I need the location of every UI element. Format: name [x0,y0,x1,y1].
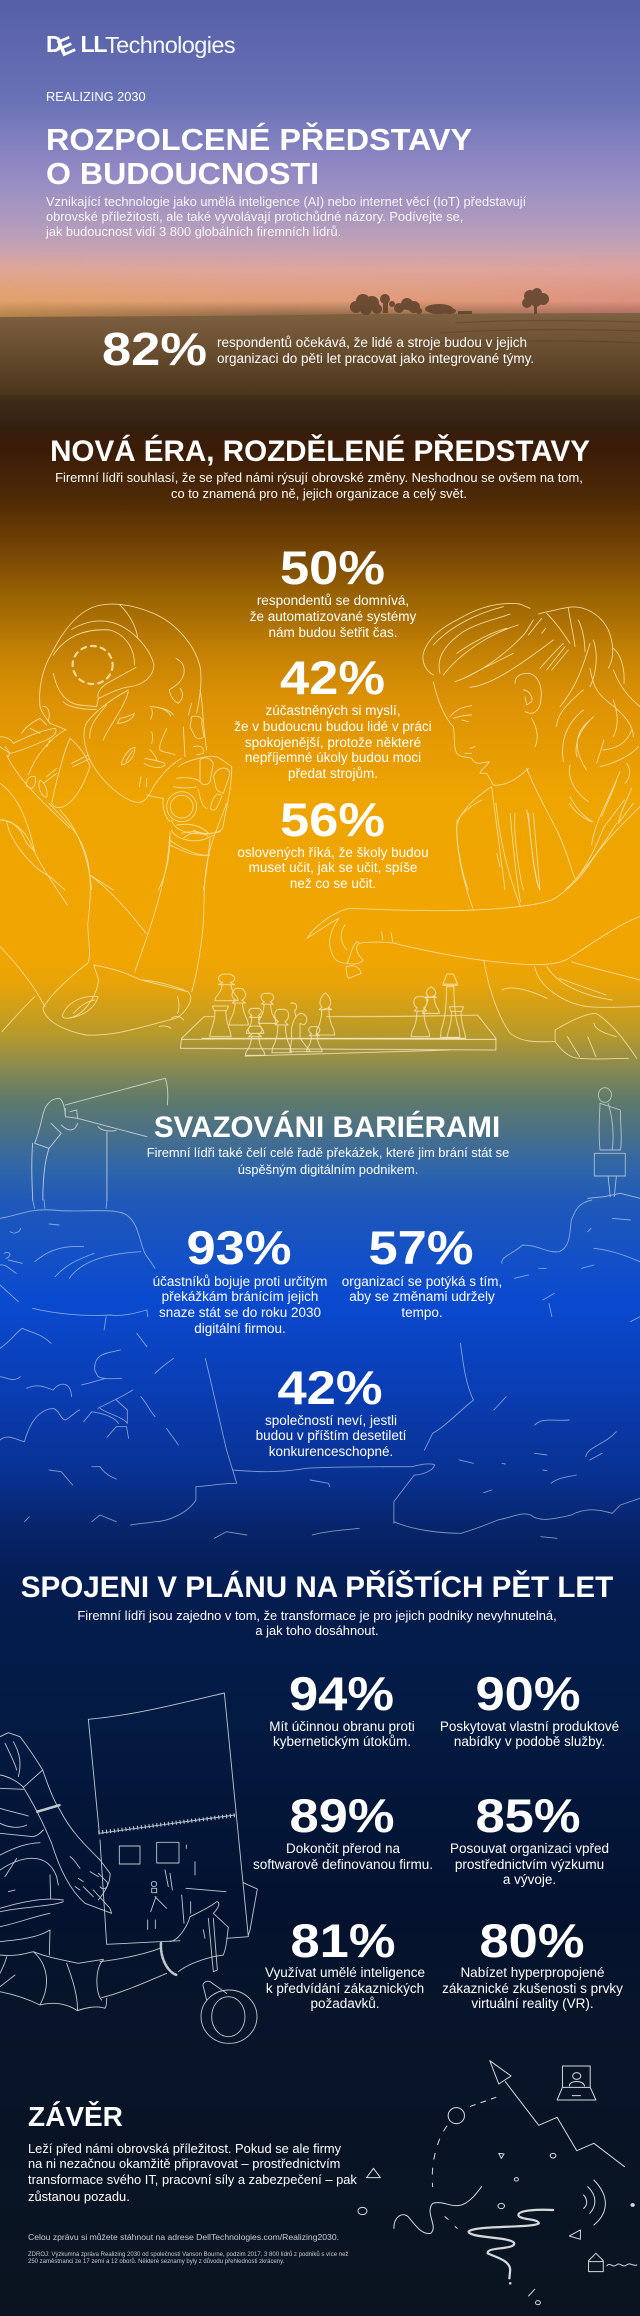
stat block: 42%: předat strojům. [288,766,378,781]
sunset glow over horizon [0,266,640,317]
stat block: 81%: k předvídání zákaznických [266,1981,424,1996]
source note: ZDROJ: Výzkumná zpráva Realizing 2030 od společnosti Vanson Bourne, podzim 2017. 3 800 lídrů z podniků s více než [28,2251,348,2258]
stat block: 42% companies: 42% [278,1361,382,1414]
illustration: woman playing chess [307,603,640,1059]
stat block: 57%: aby se změnami udržely [349,1289,495,1304]
stat block: 80%: 80% [480,1914,584,1967]
stat block: 56%: oslovených říká, že školy budou [237,845,429,860]
stat block: 42% companies: konkurenceschopné. [269,1444,393,1459]
intro text: Vznikající technologie jako umělá inteligence (AI) nebo internet věcí (IoT) představují [46,194,527,209]
illustration: woman drawing in spiral notebook [0,1693,257,2043]
stat block: 93%: digitální firmou. [194,1321,286,1336]
section intro: barriers: úspěšným digitálním podnikem. [238,1162,418,1177]
conclusion text: transformace svého IT, pracovní síly a zabezpečení – pak [28,2172,357,2187]
illustration: arrow, laptop and doodles [358,2061,637,2305]
intro text [45,194,527,239]
heading: barriers: SVAZOVÁNI BARIÉRAMI [154,1110,500,1144]
conclusion text: Leží před námi obrovská příležitost. Pokud se ale firmy [28,2141,342,2156]
intro text: obrovské příležitosti, ale také vyvolávají protichůdné názory. Podívejte se, [46,209,463,224]
stat block: 80% [442,1914,623,2011]
illustration: robot playing chess [0,604,232,1035]
stat block: 42%: nepříjemné úkoly budou moci [245,750,421,765]
stat block: 57% [342,1221,502,1320]
stat block: 85% [450,1789,609,1887]
stat 82%: 82% [102,323,207,375]
stat block: 89%: softwarově definovanou firmu. [253,1857,433,1872]
stat block: 90%: nabídky v podobě služby. [454,1734,605,1749]
section intro: united [77,1608,557,1638]
stat block: 42% companies: společností neví, jestli [265,1413,397,1428]
stat block: 42%: spokojenější, protože některé [245,735,421,750]
title: O BUDOUCNOSTI [46,156,319,191]
stat block: 90% [440,1667,619,1749]
logo: Dell Technologies: E [53,31,79,62]
logo: Dell Technologies: D [46,31,63,57]
heading: conclusion: ZÁVĚR [28,2101,123,2132]
stat block: 57%: 57% [368,1221,474,1274]
section intro: new era: Firemní lídři souhlasí, že se před námi rýsují obrovské změny. Neshodnou se ovšem na tom, [55,470,583,485]
stat block: 50%: že automatizované systémy [250,609,417,624]
section intro: new era [55,470,583,501]
stat block: 90%: 90% [476,1667,580,1720]
stat block: 89% [253,1789,433,1872]
stat block: 56% [237,793,429,891]
heading: united: SPOJENI V PLÁNU NA PŘÍŠTÍCH PĚT LET [21,1570,613,1604]
stat block: 56%: muset učit, jak se učit, spíše [249,860,417,875]
intro text: jak budoucnost vidí 3 800 globálních firemních lídrů. [45,224,341,239]
stat block: 94% [269,1667,415,1749]
illustration: person with briefcase, right [588,1088,640,1198]
stat block: 42% companies [256,1361,407,1459]
section intro: united: Firemní lídři jsou zajedno v tom, že transformace je pro jejich podniky nevyhnutelná, [77,1608,557,1623]
logo: Dell Technologies [46,31,235,62]
logo: Dell Technologies: LL [80,31,107,57]
stat block: 50%: 50% [280,541,385,594]
stat block: 81% [265,1914,425,2011]
stat block: 56%: než co se učit. [290,876,376,891]
trees on horizon [350,288,549,315]
stat block: 90%: Poskytovat vlastní produktové [440,1719,619,1734]
stat block: 42%: zúčastněných si myslí, [265,703,401,718]
heading: new era: NOVÁ ÉRA, ROZDĚLENÉ PŘEDSTAVY [50,434,590,468]
conclusion text: zůstanou pozadu. [28,2189,130,2204]
stat block: 81%: požadavků. [310,1996,380,2011]
conclusion text [28,2141,357,2204]
stat block: 42%: že v budoucnu budou lidé v práci [234,719,432,734]
stat block: 81%: 81% [290,1914,396,1967]
chess board and pieces [180,974,496,1056]
source note [28,2251,348,2265]
stat block: 50% [250,541,417,640]
stat block: 80%: Nabízet hyperpropojené [460,1965,605,1980]
stat 82%: organizaci do pěti let pracovat jako integrované týmy. [217,351,534,366]
stat block: 89%: 89% [290,1789,394,1842]
stat block: 93% [153,1221,327,1336]
source note: 250 zaměstnanci ze 17 zemí a 12 oborů. Některé seznamy byly z důvodu přehlednosti zkráceny. [28,2258,285,2265]
stat block: 94%: Mít účinnou obranu proti [269,1719,415,1734]
conclusion text: na ni nezačnou okamžitě připravovat – prostřednictvím [28,2156,340,2171]
stat block: 50%: nám budou šetřit čas. [268,625,398,640]
stat block: 80%: virtuální reality (VR). [471,1996,594,2011]
stat block: 85%: a vývoje. [503,1872,556,1887]
stat block: 89%: Dokončit přerod na [286,1841,401,1856]
stat 82% [102,323,534,375]
logo: Dell Technologies: Technologies [105,32,235,58]
illustration: cracked landscape [0,1200,640,1538]
download note: Celou zprávu si můžete stáhnout na adrese DellTechnologies.com/Realizing2030. [28,2232,339,2242]
section intro: barriers [147,1145,509,1177]
stat block: 50%: respondentů se domnívá, [257,593,409,608]
stat block: 57%: organizací se potýká s tím, [342,1274,502,1289]
stat block: 42% companies: budou v příštím desetiletí [256,1428,407,1443]
section intro: united: a jak toho dosáhnout. [255,1623,379,1638]
section intro: new era: co to znamená pro ně, jejich organizace a celý svět. [171,486,467,501]
title: ROZPOLCENÉ PŘEDSTAVY [46,121,472,157]
stat block: 93%: překážkám bránícím jejich [162,1289,318,1304]
eyebrow: REALIZING 2030 [46,89,146,104]
stat block: 42% [234,651,432,781]
stat block: 93%: 93% [186,1221,292,1274]
illustration: woman at telescope, left [32,1078,168,1200]
stat block: 56%: 56% [280,793,385,846]
stat block: 80%: zákaznické zkušenosti s prvky [442,1981,623,1996]
stat block: 93%: účastníků bojuje proti určitým [153,1274,327,1289]
stat 82%: respondentů očekává, že lidé a stroje budou v jejich [217,335,527,350]
title [46,121,472,191]
stat block: 94%: kybernetickým útokům. [273,1734,411,1749]
field at dusk [0,313,640,430]
stat block: 85%: 85% [476,1789,580,1842]
stat block: 85%: prostřednictvím výzkumu [455,1857,604,1872]
stat block: 93%: snaze stát se do roku 2030 [159,1305,321,1320]
stat block: 81%: Využívat umělé inteligence [265,1965,425,1980]
stat block: 85%: Posouvat organizaci vpřed [450,1841,609,1856]
section intro: barriers: Firemní lídři také čelí celé řadě překážek, které jim brání stát se [147,1145,509,1160]
stat block: 57%: tempo. [401,1305,443,1320]
stat block: 42%: 42% [280,651,385,704]
stat block: 94%: 94% [289,1667,394,1720]
